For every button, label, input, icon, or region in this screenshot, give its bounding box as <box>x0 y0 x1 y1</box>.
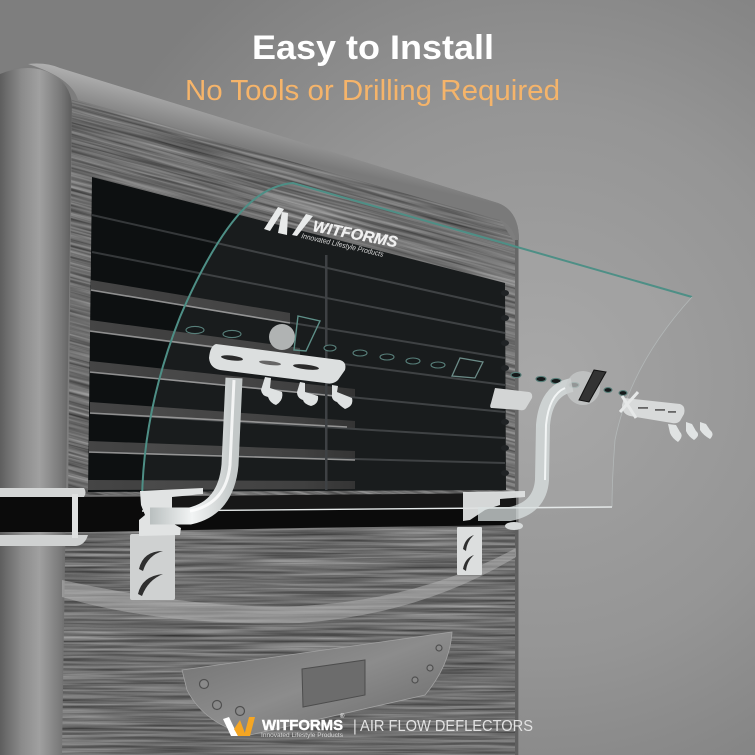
exploded loose bracket parts <box>620 392 712 442</box>
knob under band <box>505 522 523 530</box>
cabinet body <box>0 65 519 755</box>
left mounted bracket <box>130 316 352 600</box>
plate slots <box>221 354 319 371</box>
tube highlight <box>545 388 565 480</box>
cross fitting <box>620 392 638 418</box>
panel buttons <box>200 645 442 716</box>
panel plate <box>182 632 452 735</box>
mounting holes <box>186 326 627 395</box>
title: Easy to Install <box>252 29 494 67</box>
clamp upright <box>72 494 78 538</box>
loose grey plate <box>490 388 532 410</box>
glass top and left edge <box>142 183 692 500</box>
louvre bright lines <box>89 290 355 460</box>
clamp block <box>139 488 203 536</box>
loose plate slots <box>638 407 676 413</box>
glass deflector sheet <box>142 183 692 511</box>
small dark tab <box>452 358 483 378</box>
dial glass clip <box>579 370 606 402</box>
clamp block <box>463 491 525 521</box>
product label: | AIR FLOW DEFLECTORS <box>353 718 533 735</box>
brand mark <box>223 717 255 736</box>
louvre top edges <box>89 215 505 463</box>
loose plate <box>622 398 684 423</box>
upper wood face <box>0 100 586 612</box>
clamp bottom rail <box>0 535 88 546</box>
right cabinet edge <box>515 240 518 755</box>
glass pane <box>142 183 692 510</box>
tube highlight <box>190 380 234 511</box>
glass logo <box>264 207 400 259</box>
glass logo mark <box>264 207 313 236</box>
brand wordmark: WITFORMS <box>262 717 343 734</box>
registered mark: ® <box>340 713 345 720</box>
brand tagline: Innovated Lifestyle Products <box>261 732 344 739</box>
thumb knobs <box>261 377 352 409</box>
bottom brand footer <box>223 713 533 739</box>
glass logo wordmark: WITFORMS <box>311 218 400 251</box>
subtitle: No Tools or Drilling Required <box>185 75 560 107</box>
glass right edge <box>612 297 692 507</box>
foot plate <box>457 527 482 575</box>
vent grille with louvres <box>88 177 509 492</box>
slot dome <box>269 324 295 350</box>
cooler cabinet <box>0 64 586 755</box>
foot plate <box>130 534 175 600</box>
right mounted bracket <box>452 358 606 575</box>
display window <box>302 660 365 707</box>
lower curved light band <box>62 548 516 623</box>
translucent curved tube <box>478 385 572 514</box>
glass bottom edge <box>142 507 612 511</box>
left band clamp <box>0 488 88 546</box>
glass logo tagline: Innovated Lifestyle Products <box>301 231 385 259</box>
grille dark base <box>88 177 506 492</box>
black support band <box>0 493 516 532</box>
curved support tube <box>150 378 234 516</box>
loose thumb knobs <box>668 422 712 442</box>
lower wood face <box>62 495 516 755</box>
side column <box>0 68 72 755</box>
small glass tab <box>294 316 320 351</box>
centre divider <box>325 255 328 490</box>
louvre tips <box>501 290 509 476</box>
top bevel <box>28 64 519 240</box>
clamp top rail <box>0 488 86 497</box>
louvre light bands <box>88 280 355 490</box>
dial disc <box>566 371 600 405</box>
control panel <box>182 632 452 735</box>
bracket plate <box>209 344 345 384</box>
